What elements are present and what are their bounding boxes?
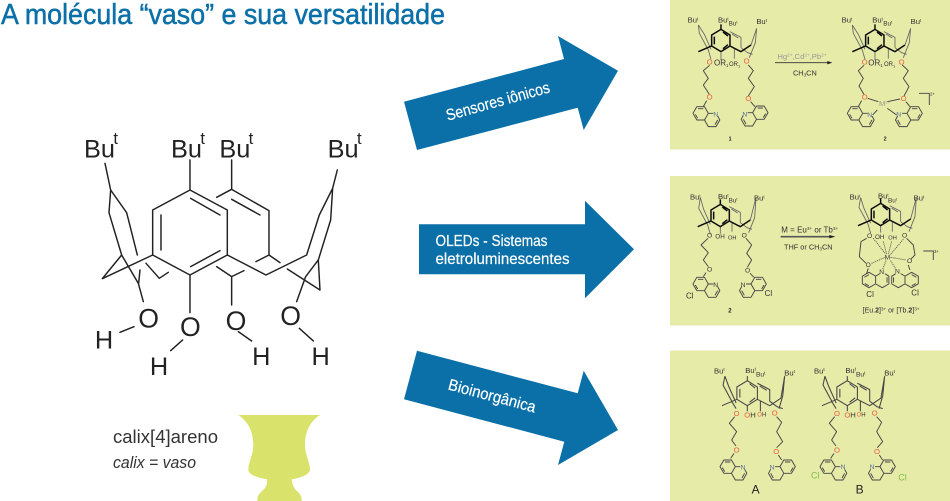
molecule 2: 2+ (930, 92, 935, 97)
molecule A: OH (744, 410, 756, 419)
molecule 1 (688, 16, 768, 142)
molecule A: t (755, 367, 757, 372)
molecule B: t (894, 369, 896, 374)
molecule 1: O (707, 57, 713, 66)
metal complex: N (879, 269, 884, 276)
molecule 2 with chlorine: Cl (765, 289, 772, 298)
arrow: Bioinorgânica (404, 351, 618, 465)
molecule A: O (734, 446, 740, 455)
molecule 2 with chlorine: Bu (729, 197, 736, 204)
reaction arrow: Hg, Cd, Pb: CH (793, 68, 804, 77)
main calix[4]arene structure: Bu (171, 135, 202, 163)
metal complex: Cl (866, 290, 874, 299)
molecule 1: O (707, 93, 713, 102)
molecule 2: O (899, 57, 905, 66)
molecule A: O (734, 409, 740, 418)
molecule A: N (770, 465, 775, 472)
molecule 1: O (744, 56, 750, 65)
caption: calix[4]areno (113, 427, 218, 472)
molecule B: Cl (898, 473, 907, 483)
main calix[4]arene structure: O (280, 301, 301, 331)
metal complex: t (887, 193, 889, 198)
molecule B: N (870, 464, 875, 471)
molecule A: A (752, 482, 760, 496)
molecule B: Bu (845, 366, 855, 375)
arrow: Bioinorgânica: Bioinorgânica (446, 377, 538, 416)
main calix[4]arene structure: Bu (219, 135, 250, 163)
molecule A: Bu (784, 368, 794, 377)
molecule 2: t (851, 17, 853, 22)
reaction arrow: Eu, Tb: 3+ (807, 226, 812, 231)
molecule 1: OR (714, 59, 726, 68)
reaction arrow: Eu, Tb: M = Eu (781, 225, 807, 234)
molecule B: O (874, 447, 880, 456)
molecule A: t (794, 369, 796, 374)
arrow: OLEDs: eletroluminescentes (436, 251, 570, 268)
reaction arrow: Hg, Cd, Pb: 2+ (821, 53, 827, 58)
metal complex (850, 192, 939, 315)
main calix[4]arene structure: O (138, 303, 159, 333)
metal complex: 3+ (934, 249, 939, 254)
molecule 2: OR (884, 62, 893, 68)
metal complex: Bu (878, 192, 887, 201)
metal complex: t (896, 196, 898, 201)
arrow: Sensores iônicos: Sensores iônicos (444, 80, 552, 125)
molecule B: Bu (856, 372, 864, 379)
reaction arrow: Hg, Cd, Pb: 3 (804, 73, 807, 78)
molecule 2: 1 (880, 63, 883, 68)
main calix[4]arene structure: H (311, 343, 330, 371)
molecule 1: 1 (738, 63, 741, 68)
molecule 1: Bu (756, 17, 766, 26)
molecule 2: 2+ (885, 99, 891, 104)
molecule 1: Bu (688, 16, 697, 25)
molecule B: B (856, 482, 864, 496)
reaction arrow: Eu, Tb: 3 (819, 246, 822, 251)
molecule A: t (764, 370, 766, 375)
metal complex: Bu (888, 197, 896, 204)
molecule B: Bu (814, 366, 823, 375)
arrow: Sensores iônicos (404, 36, 618, 150)
molecule A: O (772, 409, 778, 418)
metal complex: O (907, 258, 912, 265)
molecule 2 with chlorine: N (713, 282, 718, 289)
molecule 1: t (736, 19, 738, 24)
reaction arrow: Eu, Tb: CN (822, 242, 833, 251)
metal complex: [Eu.2] (863, 308, 881, 315)
molecule 2: Bu (842, 16, 851, 25)
reaction arrow: Eu, Tb: THF or CH (784, 242, 819, 251)
molecule B: N (841, 464, 846, 471)
molecule 2 with chlorine: t (763, 195, 765, 200)
molecule 2: N (867, 112, 872, 119)
molecule 2: O (862, 57, 868, 66)
molecule B: t (864, 370, 866, 375)
molecule 2 with chlorine: t (727, 193, 729, 198)
molecule 2: Bu (883, 20, 891, 27)
metal complex: O (867, 233, 872, 240)
molecule 2 with chlorine: O (745, 268, 750, 275)
molecule 1: t (697, 17, 699, 22)
main calix[4]arene structure: H (252, 343, 270, 371)
molecule 2 with chlorine: O (707, 266, 712, 273)
molecule A (714, 366, 796, 496)
metal complex: 3+ (881, 306, 887, 311)
main calix[4]arene structure: O (226, 306, 246, 336)
metal complex: or [Tb. (886, 308, 908, 315)
molecule A: Bu (756, 372, 764, 379)
molecule B: Bu (884, 368, 894, 377)
molecule 1: OR (729, 62, 738, 68)
molecule 1: O (745, 94, 751, 103)
caption: calix[4]areno: calix[4]areno (113, 427, 218, 447)
molecule 2: O (862, 93, 868, 102)
reaction arrow: Eu, Tb: 3+ (833, 226, 838, 231)
panel: bioinorgânica (670, 350, 950, 501)
molecule 1: t (766, 18, 768, 23)
reaction arrow: Hg, Cd, Pb: CN (806, 68, 817, 77)
molecule A: O (773, 447, 779, 456)
metal complex: OH (875, 234, 885, 241)
metal complex: t (859, 193, 861, 198)
metal complex: O (902, 233, 907, 240)
metal complex: Bu (850, 192, 859, 201)
main calix[4]arene structure: t (113, 129, 118, 148)
main calix[4]arene structure: H (95, 326, 113, 354)
molecule B: Cl (811, 470, 819, 480)
molecule 2: OR (868, 59, 880, 68)
main calix[4]arene structure: Bu (84, 135, 115, 163)
metal complex: t (923, 195, 925, 200)
reaction arrow: Hg, Cd, Pb: ,Cd (792, 52, 804, 61)
molecule A: t (723, 367, 725, 372)
molecule 2: Bu (872, 16, 882, 25)
molecule 1: Bu (718, 16, 727, 25)
molecule 2: t (882, 17, 884, 22)
metal complex: OH (888, 236, 897, 242)
molecule 2 with chlorine: OH (728, 235, 736, 241)
molecule B (811, 366, 907, 496)
molecule 2 with chlorine: O (742, 232, 747, 239)
molecule 2: M (879, 99, 885, 108)
panel: sensores iônicos (670, 0, 950, 150)
main calix[4]arene structure: H (150, 353, 168, 381)
molecule B: t (855, 367, 857, 372)
main calix[4]arene structure: Bu (328, 135, 359, 163)
arrow: OLEDs: OLEDs - Sistemas (436, 233, 548, 250)
main calix[4]arene structure (84, 129, 362, 381)
molecule 2 with chlorine: N (741, 282, 746, 289)
molecule 1: 1 (726, 63, 729, 68)
reaction arrow: Eu, Tb: or Tb (812, 225, 833, 234)
metal complex: O (866, 262, 871, 269)
molecule 2: 1 (893, 63, 896, 68)
molecule 2 with chlorine: t (699, 193, 701, 198)
metal complex: Bu (914, 194, 923, 203)
caption: calix[4]areno: calix = vaso (113, 453, 196, 472)
metal complex: M (885, 254, 890, 261)
molecule A: Bu (745, 366, 755, 375)
reaction arrow: Hg, Cd, Pb: 2+ (804, 53, 810, 58)
molecule 2: t (920, 18, 922, 23)
reaction arrow: Hg, Cd, Pb: 2+ (787, 53, 793, 58)
molecule 1: 1 (729, 136, 732, 142)
molecule 1: N (713, 112, 718, 119)
molecule 2 with chlorine: Bu (690, 192, 699, 201)
metal complex: 2] (908, 308, 914, 315)
main calix[4]arene structure: t (200, 129, 205, 148)
metal complex: Cl (911, 289, 919, 298)
molecule B: O (834, 446, 840, 455)
molecule 2: N (896, 112, 901, 119)
metal complex: 3+ (914, 306, 920, 311)
molecule B: O (834, 409, 840, 418)
molecule 2 with chlorine: Bu (718, 192, 727, 201)
molecule 1: N (742, 111, 747, 118)
molecule B: t (823, 367, 825, 372)
reaction arrow: Eu, Tb (781, 225, 838, 251)
molecule 2 with chlorine: t (736, 196, 738, 201)
molecule 2 with chlorine: Cl (686, 291, 694, 300)
main calix[4]arene structure: O (180, 312, 201, 342)
icon: vase (238, 415, 320, 501)
molecule 2 with chlorine: Bu (754, 194, 763, 203)
molecule 2: 2 (884, 136, 887, 142)
molecule B: OH (844, 410, 856, 419)
molecule A: Bu (714, 366, 723, 375)
molecule 2 with chlorine: OH (715, 234, 725, 241)
molecule 1: t (727, 17, 729, 22)
molecule A: N (741, 465, 746, 472)
panel: OLEDs (670, 176, 950, 326)
molecule 2: Bu (911, 17, 920, 26)
molecule 2: O (901, 94, 907, 103)
molecule B: OH (857, 413, 866, 419)
molecule B: O (872, 409, 878, 418)
molecule 2 with chlorine: 2 (728, 309, 732, 315)
main calix[4]arene structure: t (357, 129, 362, 148)
molecule 2 (842, 16, 935, 142)
molecule 2: t (891, 19, 893, 24)
molecule 2 with chlorine (686, 192, 772, 315)
arrow: OLEDs (419, 201, 634, 298)
metal complex: N (895, 268, 900, 275)
molecule A: OH (757, 413, 766, 419)
reaction arrow: Hg, Cd, Pb (775, 52, 832, 78)
main calix[4]arene structure: t (249, 129, 254, 148)
molecule 2 with chlorine: O (707, 233, 712, 240)
reaction arrow: Hg, Cd, Pb: Hg (777, 52, 787, 61)
molecule 1: Bu (729, 20, 736, 27)
reaction arrow: Hg, Cd, Pb: ,Pb (810, 52, 821, 61)
